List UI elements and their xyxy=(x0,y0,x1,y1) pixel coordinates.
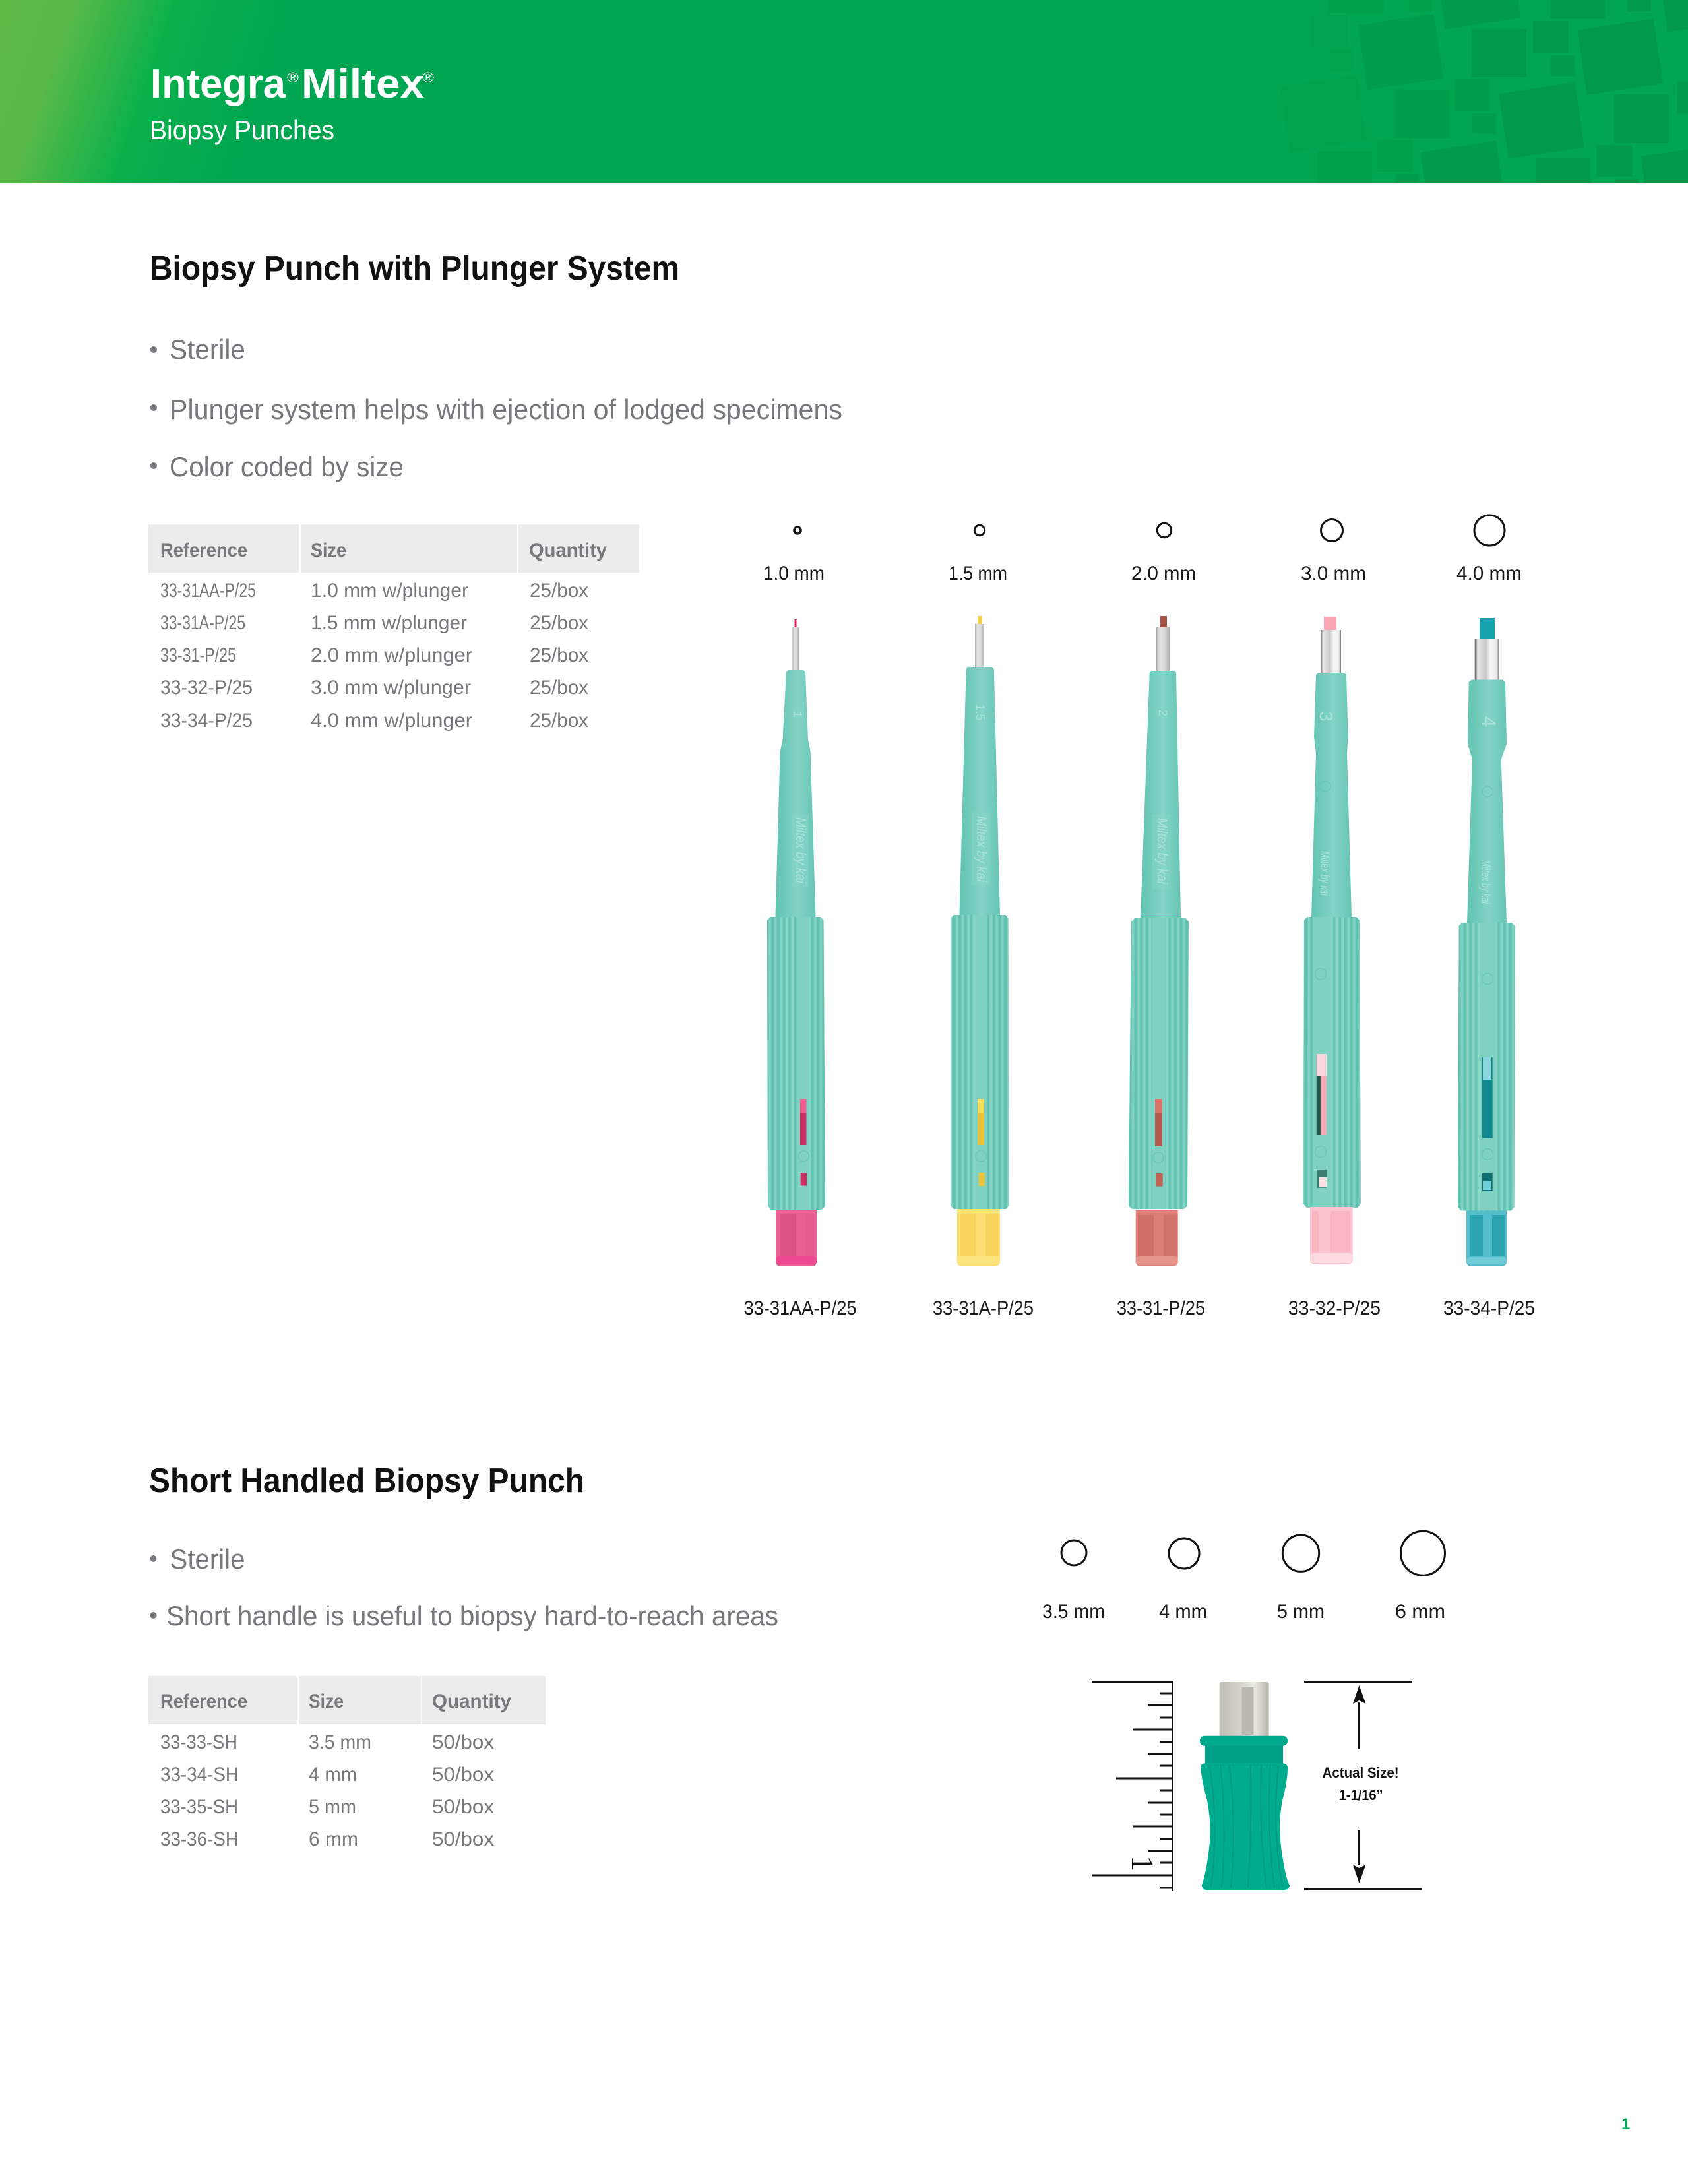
punch device: 4.0 mm: Miltex by kai xyxy=(1478,860,1492,904)
table: plunger system: Reference xyxy=(160,540,247,561)
table: short handled: 4 mm xyxy=(309,1764,357,1786)
table: plunger system: 33-31AA-P/25 xyxy=(160,580,256,602)
header square texture xyxy=(1280,0,1688,185)
punch device: 1.5 mm: 1.5 xyxy=(974,704,987,721)
actual size dimension arrows xyxy=(1304,1682,1422,1889)
part number labels xyxy=(744,1297,1535,1319)
punch device: 4.0 mm: 4 xyxy=(1478,716,1499,727)
table: plunger system: Size xyxy=(311,540,346,561)
punch device: 1.0 mm: Miltex by kai xyxy=(793,817,808,884)
table: short handled: 33-33-SH xyxy=(160,1732,237,1753)
brand title xyxy=(150,61,434,107)
bullet list: short handled xyxy=(150,1544,778,1631)
size labels: plunger system: 4.0 mm xyxy=(1456,563,1522,584)
table: short handled: 50/box xyxy=(432,1796,494,1818)
table: plunger system: 25/box xyxy=(530,580,588,602)
part number labels: 33-31-P/25 xyxy=(1117,1297,1205,1319)
punch device: 1.0 mm: 1 xyxy=(791,711,804,718)
subtitle: Biopsy Punches xyxy=(150,115,334,145)
actual size note xyxy=(1323,1764,1399,1803)
bullet list: plunger system: Color coded by size xyxy=(170,451,404,482)
size labels: short handled: 6 mm xyxy=(1395,1601,1445,1623)
table: short handled: Reference xyxy=(160,1691,247,1712)
table: plunger system: 25/box xyxy=(530,644,588,666)
table: short handled: 50/box xyxy=(432,1828,494,1850)
table: plunger system: 33-34-P/25 xyxy=(160,710,253,732)
table: plunger system: 2.0 mm w/plunger xyxy=(311,644,472,666)
size labels: plunger system: 2.0 mm xyxy=(1131,563,1196,584)
punch device: 2.0 mm xyxy=(1129,616,1189,1266)
size labels: short handled: 4 mm xyxy=(1159,1601,1207,1623)
table: plunger system: 25/box xyxy=(530,677,588,699)
table: short handled: 3.5 mm xyxy=(309,1732,371,1753)
size labels: short handled: 3.5 mm xyxy=(1042,1601,1105,1623)
table: short handled: 33-36-SH xyxy=(160,1828,239,1850)
table: plunger system: Quantity xyxy=(529,540,607,561)
table: short handled: 6 mm xyxy=(309,1828,358,1850)
ruler: 1 xyxy=(1125,1856,1160,1871)
short handled punch photo xyxy=(1200,1682,1290,1890)
punch device: 2.0 mm: Miltex by kai xyxy=(1154,818,1170,885)
table: plunger system: 3.0 mm w/plunger xyxy=(311,677,471,699)
punch device: 1.5 mm: Miltex by kai xyxy=(974,816,989,883)
heading: plunger system: Biopsy Punch with Plunger System xyxy=(150,249,679,288)
brand title: Integra xyxy=(150,61,286,107)
table: short handled: 5 mm xyxy=(309,1796,356,1818)
size labels: plunger system: 1.5 mm xyxy=(949,563,1007,584)
size labels: short handled: 5 mm xyxy=(1277,1601,1325,1623)
size labels: plunger system: 1.0 mm xyxy=(763,563,825,584)
part number labels: 33-34-P/25 xyxy=(1443,1297,1535,1319)
bullet list: plunger system xyxy=(150,334,842,482)
table: short handled: 50/box xyxy=(432,1764,494,1786)
table: plunger system: 25/box xyxy=(530,710,588,732)
brand title: ® xyxy=(422,69,434,86)
table: plunger system: 25/box xyxy=(530,612,588,634)
punch device: 3.0 mm: 3 xyxy=(1316,711,1336,722)
part number labels: 33-32-P/25 xyxy=(1288,1297,1381,1319)
table: plunger system: 33-32-P/25 xyxy=(160,677,253,699)
table: short handled xyxy=(148,1676,546,1850)
bullet list: plunger system: Plunger system helps with ejection of lodged specimens xyxy=(170,394,842,425)
actual size note: 1-1/16” xyxy=(1339,1787,1383,1803)
actual size note: Actual Size! xyxy=(1323,1764,1399,1781)
table: plunger system: 33-31A-P/25 xyxy=(160,612,245,634)
brand title: Miltex xyxy=(301,61,425,107)
bullet list: short handled: Short handle is useful to biopsy hard-to-reach areas xyxy=(166,1600,778,1631)
table: short handled: 50/box xyxy=(432,1732,494,1753)
punch device: 1.5 mm xyxy=(951,616,1009,1266)
brand title: ® xyxy=(287,69,299,86)
table: plunger system xyxy=(148,524,639,732)
size labels: plunger system xyxy=(763,563,1522,584)
table: short handled: 33-34-SH xyxy=(160,1764,239,1786)
bullet list: short handled: Sterile xyxy=(170,1544,245,1575)
heading: short handled: Short Handled Biopsy Punch xyxy=(149,1462,584,1500)
ruler xyxy=(1092,1682,1173,1891)
part number labels: 33-31A-P/25 xyxy=(933,1297,1034,1319)
table: plunger system: 1.0 mm w/plunger xyxy=(311,580,468,602)
size circles: plunger system xyxy=(794,515,1505,546)
header banner xyxy=(0,0,1688,185)
size labels: plunger system: 3.0 mm xyxy=(1301,563,1366,584)
punch device: 2.0 mm: 2 xyxy=(1156,710,1170,716)
table: short handled: Quantity xyxy=(432,1691,511,1712)
punch device: 4.0 mm xyxy=(1458,618,1515,1266)
part number labels: 33-31AA-P/25 xyxy=(744,1297,856,1319)
bullet list: plunger system: Sterile xyxy=(170,334,245,365)
table: short handled: 33-35-SH xyxy=(160,1796,238,1818)
table: plunger system: 1.5 mm w/plunger xyxy=(311,612,467,634)
size circles: short handled xyxy=(1061,1531,1445,1575)
size labels: short handled xyxy=(1042,1601,1445,1623)
table: plunger system: 4.0 mm w/plunger xyxy=(311,710,472,732)
punch device: 3.0 mm xyxy=(1303,617,1361,1264)
punch device: 3.0 mm: Miltex by kai xyxy=(1317,851,1331,896)
page number: 1 xyxy=(1621,2115,1630,2133)
table: short handled: Size xyxy=(309,1691,344,1712)
table: plunger system: 33-31-P/25 xyxy=(160,644,236,666)
punch device: 1.0 mm xyxy=(767,619,825,1266)
